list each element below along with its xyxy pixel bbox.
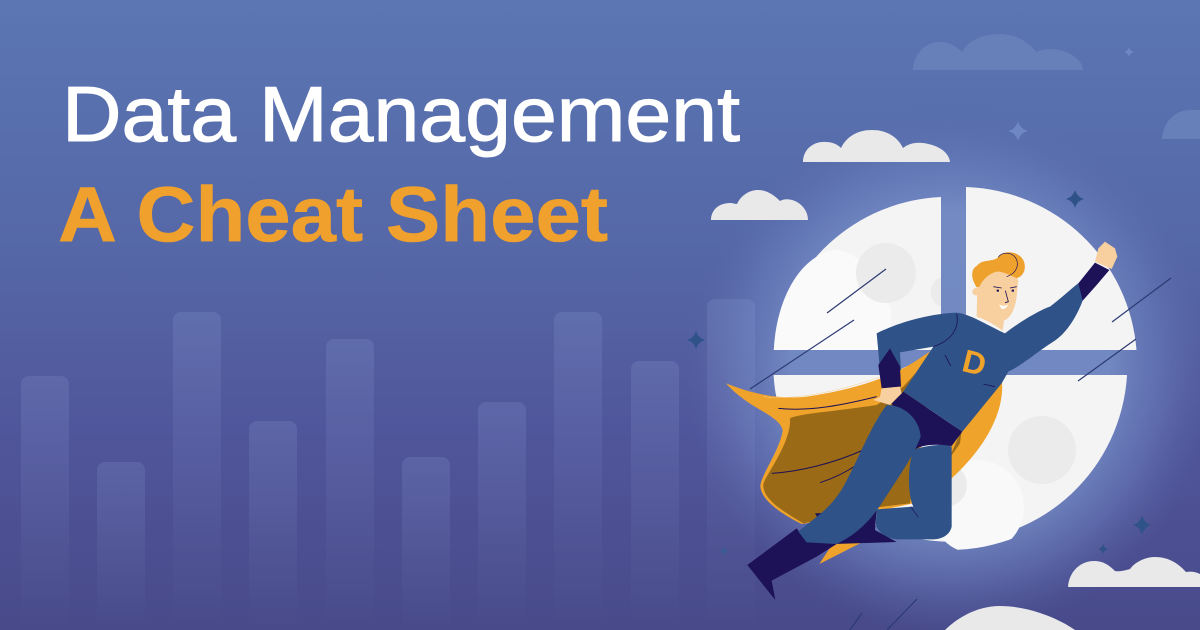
face details (993, 287, 1017, 303)
moon glow (685, 105, 1200, 630)
cape: right side (945, 378, 1002, 478)
glove: right (1078, 263, 1109, 301)
cloud: lower left white (711, 190, 808, 220)
star (1098, 544, 1108, 554)
star light small (1124, 47, 1134, 57)
glove: left (878, 348, 901, 388)
stars (687, 47, 1151, 556)
crater: behind leg (923, 463, 967, 507)
speed lines (750, 269, 1171, 630)
cloud: upper white (803, 130, 950, 162)
star (719, 546, 729, 556)
cape: fold line (772, 397, 877, 483)
pie: top left segment (774, 197, 941, 350)
background bar chart (21, 299, 755, 630)
cloud: right edge blue (1162, 110, 1200, 139)
cape (726, 348, 1002, 564)
chest letter D: D (959, 343, 990, 383)
neck and face (977, 271, 1018, 331)
pie: top right segment (966, 187, 1136, 350)
knee line (911, 507, 918, 517)
rear boot (815, 510, 897, 544)
rear leg (876, 445, 952, 539)
cape: right shadow (948, 430, 962, 460)
crater: upper light blob (774, 250, 892, 350)
pie: bottom segment (774, 375, 1127, 542)
cape: lower tip (819, 542, 863, 564)
star (687, 331, 705, 349)
cloud: bottom white (945, 606, 1075, 630)
cloud: lower right white (1068, 557, 1200, 587)
fist (1095, 242, 1117, 269)
crater: small upper (931, 277, 941, 307)
smile (999, 304, 1008, 309)
ear (972, 288, 980, 295)
belt (892, 392, 962, 451)
cape: main (726, 348, 935, 524)
hair (972, 252, 1025, 287)
hand: left (873, 387, 902, 405)
star light (1008, 121, 1028, 141)
torso and raised arm (877, 270, 1109, 432)
moon pie chart (774, 187, 1136, 554)
star (1133, 515, 1151, 535)
title line 2: A Cheat Sheet (58, 170, 608, 258)
front boot (747, 528, 837, 600)
clouds (711, 34, 1200, 630)
superhero figure (726, 242, 1117, 600)
cape: highlight (763, 367, 907, 398)
front leg (798, 405, 921, 544)
title (58, 70, 740, 258)
title line 1: Data Management (62, 70, 740, 158)
crater: lower (1008, 416, 1076, 484)
crater: upper (856, 243, 916, 303)
star (1066, 190, 1084, 208)
cloud: top right blue (913, 34, 1083, 70)
hair lines (998, 253, 1017, 277)
eyes (997, 288, 1014, 294)
body detail lines (933, 314, 995, 387)
crater: lower light blob (945, 528, 1020, 550)
cape: brown inside (763, 352, 935, 523)
